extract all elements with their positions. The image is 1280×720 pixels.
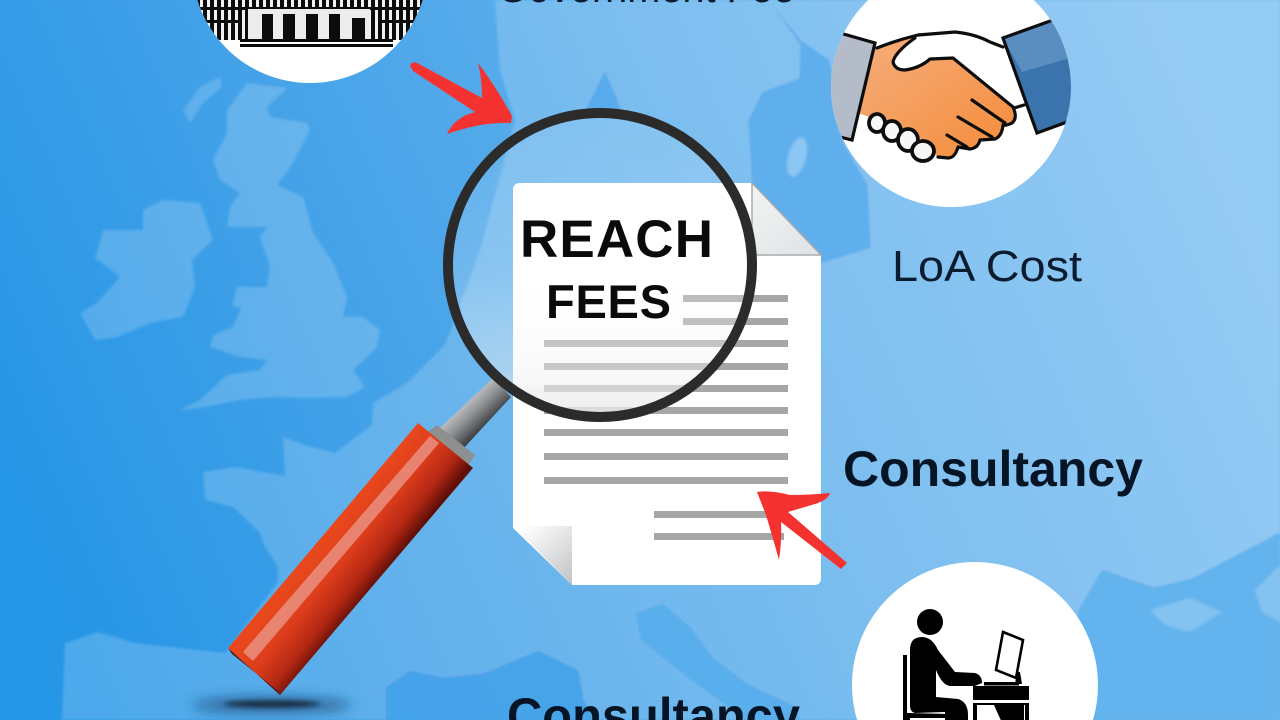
cuff: blue	[1007, 21, 1071, 131]
circle icon: government building	[190, 0, 430, 83]
monitor stand	[1015, 672, 1022, 684]
map: Adriatic sea	[635, 603, 800, 720]
map: northern islands	[183, 77, 222, 123]
keyboard	[984, 682, 1019, 686]
document: text lines	[544, 295, 788, 540]
chair	[903, 655, 945, 720]
desk	[973, 686, 1029, 720]
circle icon: person at computer	[852, 562, 1098, 720]
label: Consultancy: Consultancy	[843, 441, 1143, 497]
grip end shade	[228, 648, 280, 695]
map: Ireland	[80, 200, 213, 340]
map: northern inlet	[585, 70, 622, 110]
handle grip	[228, 423, 473, 695]
lens ring	[448, 113, 752, 417]
grip highlight	[243, 436, 439, 661]
fingers	[869, 114, 934, 161]
magnifier lens	[448, 113, 752, 417]
map: eastern islands	[1150, 565, 1280, 632]
handle collar	[428, 425, 475, 466]
hand: orange	[855, 37, 1014, 158]
document	[513, 183, 821, 585]
document: top corner fold	[752, 183, 821, 255]
person: body	[910, 637, 982, 720]
arrow: to magnifier	[410, 62, 512, 134]
heading: FEES: FEES	[546, 275, 671, 328]
map: eastern sea	[1070, 532, 1280, 720]
circle icon: handshake	[825, 0, 1080, 207]
heading: REACH: REACH	[520, 210, 713, 269]
label: LoA Cost: LoA Cost	[892, 242, 1082, 291]
arrow: to document	[757, 491, 847, 569]
handle shadow	[192, 696, 352, 714]
handle stem	[438, 378, 511, 450]
map: Baltic sea	[748, 0, 871, 263]
document: bottom corner fold	[513, 526, 572, 585]
map: Mediterranean sea	[385, 650, 596, 720]
map: Great Britain	[180, 83, 380, 410]
cuff: grey	[831, 34, 873, 138]
map: Baltic island	[783, 135, 811, 179]
person: head	[917, 609, 943, 635]
hand outline	[877, 32, 1024, 158]
magnifier handle	[192, 378, 511, 714]
monitor	[996, 632, 1023, 678]
